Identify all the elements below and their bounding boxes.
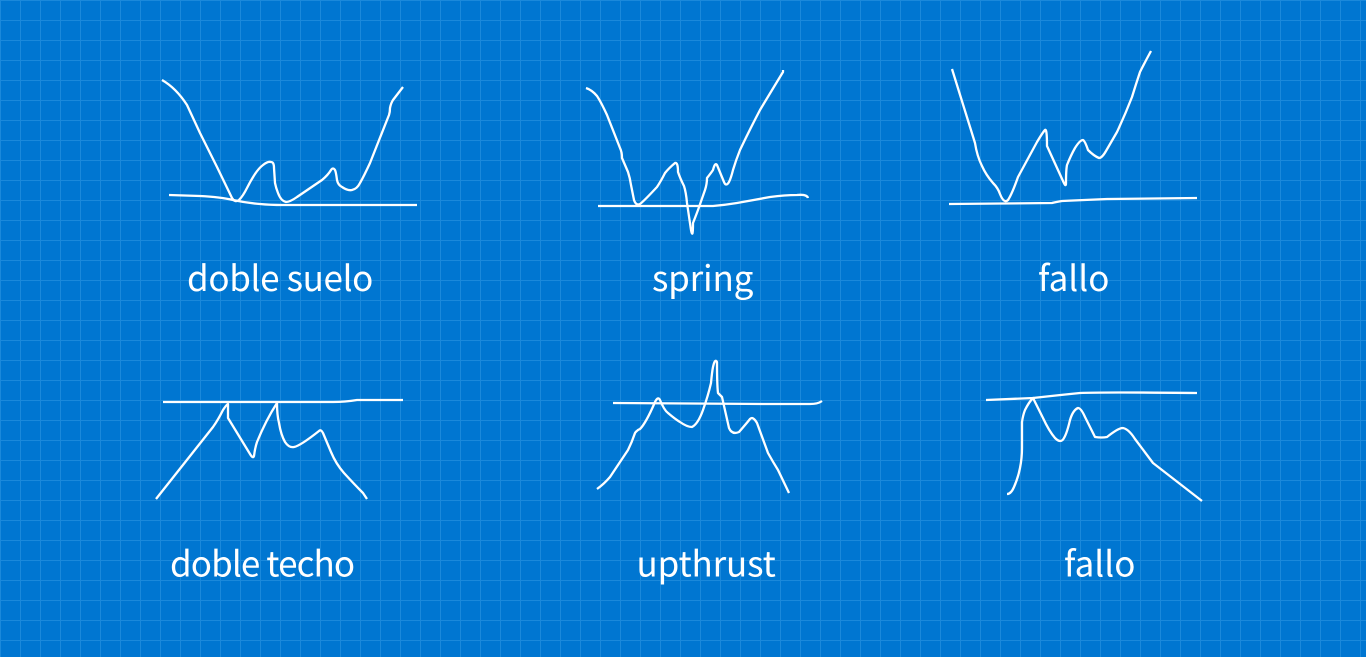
panel: doble suelo [162,80,417,302]
panel: spring [586,70,808,302]
label: doble suelo: doble suelo [187,251,373,302]
price curve: doble suelo [162,80,403,202]
price curve: fallo inferior [952,51,1151,201]
panel: fallo superior [986,392,1202,588]
price curve: upthrust [597,361,789,493]
panel: doble techo [156,400,403,588]
panel: upthrust [597,361,822,588]
label: fallo inferior: fallo [1038,251,1109,302]
resistance line: fallo superior [986,392,1197,400]
resistance line: spring [598,195,808,206]
price curve: spring [586,70,783,234]
label: upthrust: upthrust [636,536,776,588]
resistance line: doble techo [163,400,403,402]
price curve: fallo superior [1007,398,1202,501]
label: fallo superior: fallo [1064,536,1135,588]
panel: fallo inferior [949,51,1197,302]
support line: fallo inferior [949,198,1197,204]
label: spring: spring [652,251,754,302]
support line: doble suelo [169,195,417,205]
label: doble techo: doble techo [170,536,354,588]
price curve: doble techo [156,403,367,499]
resistance line: upthrust [613,401,822,404]
